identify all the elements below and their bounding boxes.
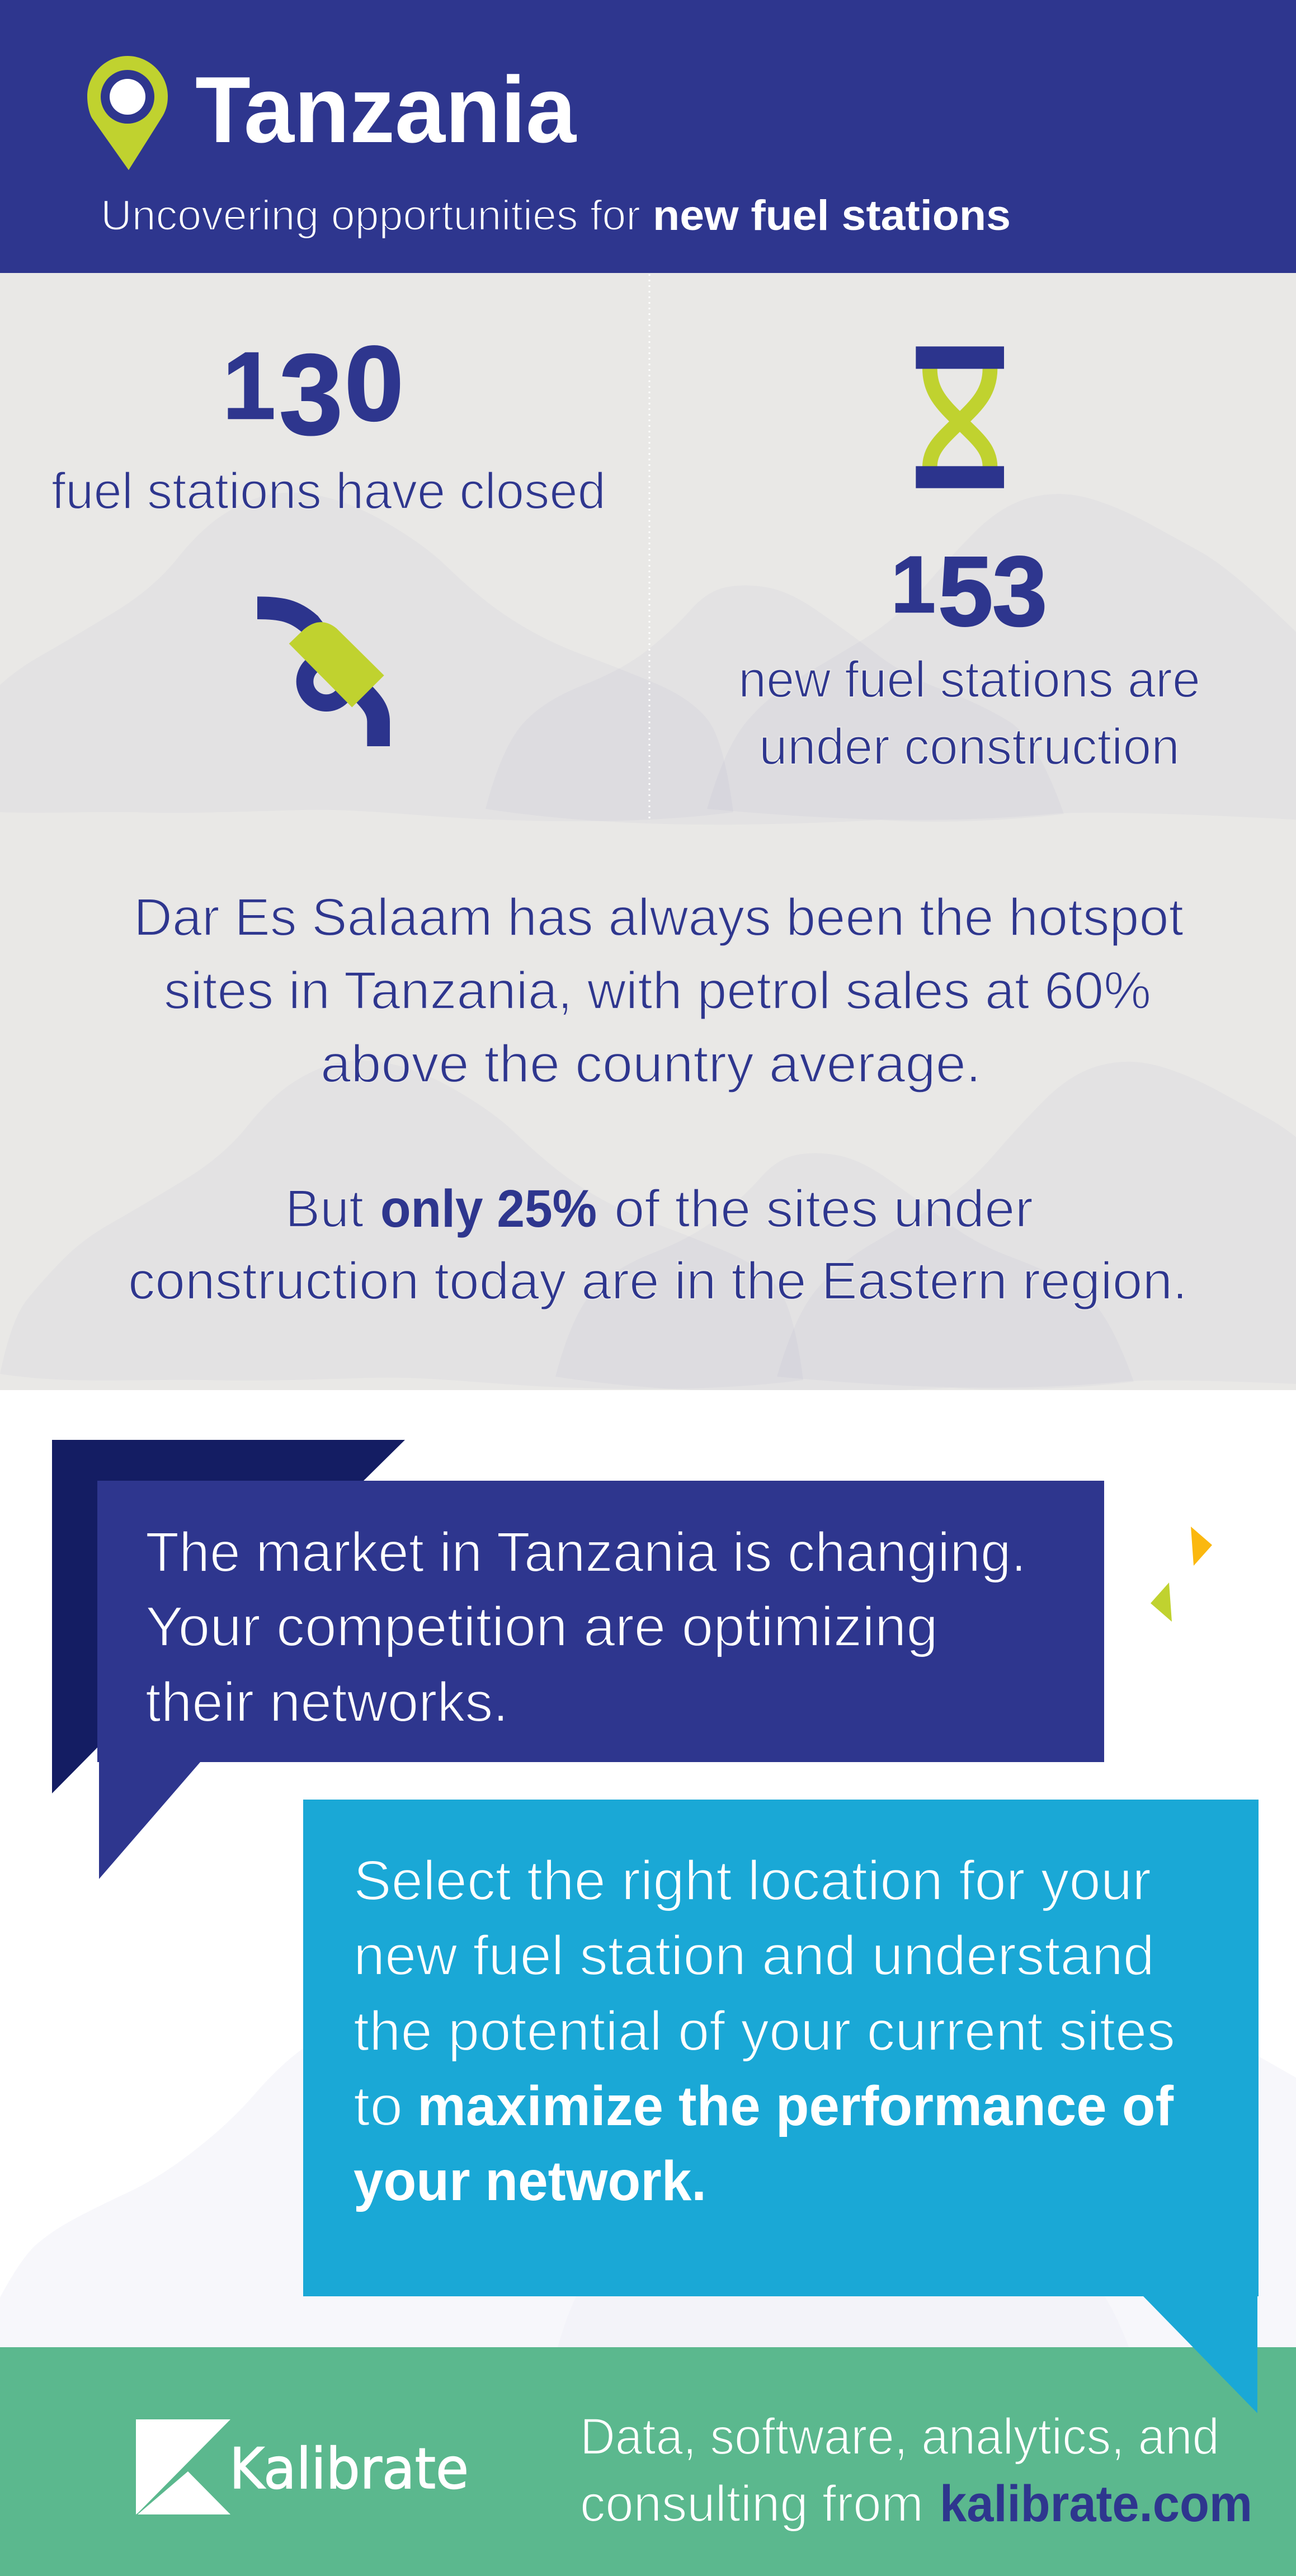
callout: market changing bbox=[52, 1440, 1104, 1879]
decoration: orange triangle bbox=[1191, 1527, 1212, 1566]
callout: select the right location bbox=[303, 1800, 1259, 2413]
label: new stations: new fuel stations are bbox=[738, 651, 1200, 708]
footer text: kalibrate.com bbox=[940, 2475, 1252, 2532]
mountain pattern: lower white area bbox=[558, 2296, 1129, 2347]
label: closed stations: fuel stations have closed bbox=[51, 463, 606, 520]
callout text: the potential of your current sites bbox=[354, 2000, 1175, 2062]
text block: Dar Es Salaam bbox=[134, 888, 1184, 1094]
stat: 130 closed bbox=[51, 324, 606, 746]
callout text bbox=[354, 1849, 1175, 2212]
text block: Dar Es Salaam: above the country average. bbox=[321, 1034, 981, 1094]
callout text: maximize the performance of bbox=[417, 2075, 1174, 2137]
icon: hourglass bbox=[916, 346, 1004, 488]
number: 130: 0 bbox=[345, 324, 404, 443]
footer text bbox=[580, 2408, 1252, 2532]
logo wordmark: Kalibrate bbox=[229, 2436, 469, 2502]
stat: 153 under construction bbox=[738, 346, 1200, 775]
callout text: to bbox=[354, 2075, 403, 2137]
logo: Kalibrate bbox=[136, 2419, 469, 2514]
mountain pattern: text panel bbox=[555, 1211, 1133, 1389]
footer band bbox=[0, 2347, 1296, 2576]
callout text: Your competition are optimizing bbox=[145, 1595, 938, 1658]
text block: only 25%: construction today are in the Eastern region. bbox=[128, 1251, 1187, 1311]
title: Tanzania bbox=[195, 57, 577, 162]
number: 153: 1 bbox=[891, 540, 936, 629]
background: grey panel bbox=[0, 273, 1296, 1390]
text block: Dar Es Salaam: sites in Tanzania, with petrol sales at 60% bbox=[164, 961, 1151, 1020]
callout box bbox=[97, 1481, 1104, 1879]
decoration: lime triangle bbox=[1151, 1583, 1172, 1622]
callout text: your network. bbox=[354, 2150, 706, 2212]
callout text: The market in Tanzania is changing. bbox=[145, 1521, 1026, 1584]
callout text: Select the right location for your bbox=[354, 1849, 1151, 1912]
subtitle: new fuel stations bbox=[653, 192, 1011, 239]
icon: location pin bbox=[87, 56, 168, 170]
label: new stations bbox=[738, 651, 1200, 775]
text block: Dar Es Salaam: Dar Es Salaam has always been the hotspot bbox=[134, 888, 1184, 947]
footer text: consulting from bbox=[580, 2475, 923, 2532]
logo mark bbox=[136, 2419, 230, 2514]
callout shadow bbox=[52, 1440, 405, 1793]
callout text: new fuel station and understand bbox=[354, 1924, 1154, 1987]
icon: fuel nozzle bbox=[257, 608, 384, 746]
callout text: their networks. bbox=[145, 1671, 508, 1734]
subtitle bbox=[101, 192, 1011, 239]
number: 153: 3 bbox=[992, 536, 1047, 647]
number: 130: 1 bbox=[223, 333, 276, 439]
text block: only 25% bbox=[128, 1179, 1187, 1311]
mountain pattern: stats panel bbox=[0, 493, 1296, 825]
callout text bbox=[145, 1521, 1026, 1734]
number: 153: 5 bbox=[938, 536, 993, 647]
label: new stations: under construction bbox=[759, 718, 1180, 775]
text block: only 25%: But bbox=[285, 1179, 364, 1238]
number: 130: 3 bbox=[279, 331, 343, 459]
divider bbox=[649, 274, 650, 819]
footer text: Data, software, analytics, and bbox=[580, 2408, 1219, 2465]
header band bbox=[0, 0, 1296, 273]
callout box bbox=[303, 1800, 1259, 2413]
text block: only 25%: only 25% bbox=[380, 1179, 597, 1238]
subtitle: Uncovering opportunities for bbox=[101, 192, 640, 239]
text block: only 25%: of the sites under bbox=[614, 1179, 1033, 1238]
